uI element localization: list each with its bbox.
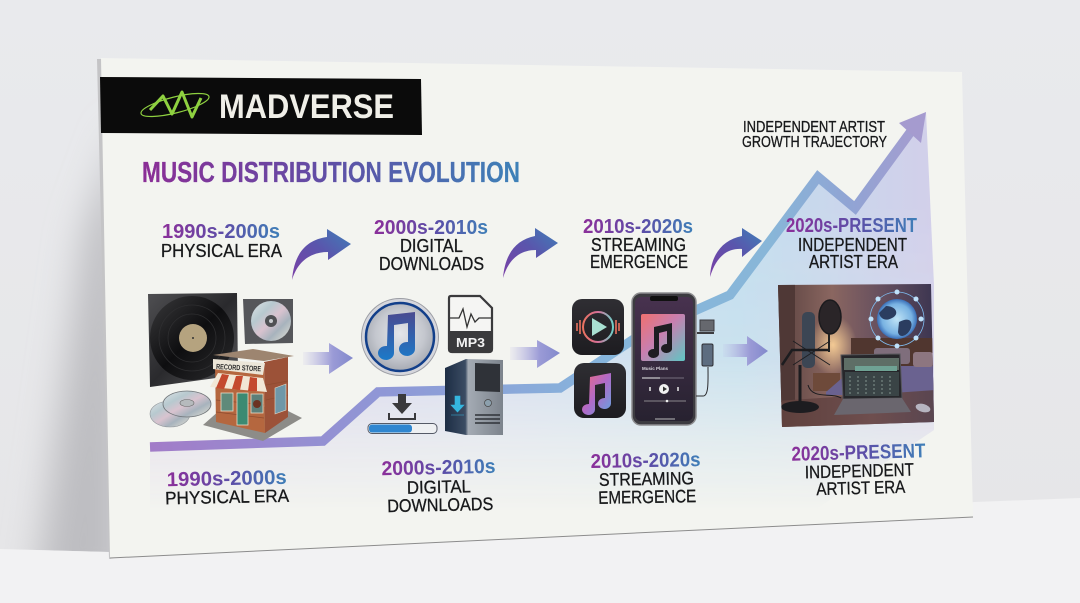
top label: digital downloads: 2000s-2010s <box>374 217 488 239</box>
bottom label: digital downloads: 2000s-2010s <box>381 456 496 480</box>
headboard and bed <box>851 338 934 395</box>
curtain <box>778 284 795 402</box>
desk <box>781 390 934 427</box>
top label: digital downloads: DOWNLOADS <box>379 254 484 274</box>
icon: record store: RECORD STORE <box>216 362 261 373</box>
globe <box>868 290 924 348</box>
bottom label: physical era <box>165 467 289 508</box>
bottom label: independent artist era: ARTIST ERA <box>816 477 906 499</box>
bottom label: physical era: 1990s-2000s <box>167 467 287 491</box>
progress bar <box>368 424 437 434</box>
icon: MP3 file <box>449 296 492 352</box>
bottom label: streaming emergence: EMERGENCE <box>598 486 696 508</box>
brand name: MADVERSE <box>219 88 394 126</box>
laptop <box>834 354 911 415</box>
top label: digital downloads <box>374 217 488 274</box>
straight arrow 2 <box>510 340 560 368</box>
bottom label: independent artist era <box>791 440 927 500</box>
top label: independent artist era: ARTIST ERA <box>809 252 898 272</box>
top label: independent artist era: 2020s-PRESENT <box>786 215 917 237</box>
wall shadow <box>26 158 109 552</box>
icon: stacked discs <box>150 391 211 427</box>
icon: desktop tower <box>445 359 503 435</box>
bottom label: digital downloads: DIGITAL <box>407 476 471 498</box>
straight arrow 1 <box>303 343 353 374</box>
icon: smartphone: Music Plans <box>642 366 669 371</box>
bottom label: digital downloads <box>381 456 496 516</box>
top label: digital downloads: DIGITAL <box>400 236 463 256</box>
title: MUSIC DISTRIBUTION EVOLUTION <box>142 157 520 189</box>
straight arrow 3 <box>723 336 768 366</box>
home studio scene <box>776 282 936 430</box>
brand banner <box>100 77 422 135</box>
top label: independent artist era: INDEPENDENT <box>798 235 907 255</box>
icon: music app <box>574 363 626 418</box>
top label: streaming emergence: EMERGENCE <box>590 252 688 272</box>
poster board <box>97 58 973 559</box>
top label: streaming emergence: 2010s-2020s <box>583 216 693 238</box>
icon: connected devices <box>696 320 714 396</box>
bottom label: streaming emergence: STREAMING <box>599 468 694 490</box>
floor <box>0 498 1080 603</box>
curved arrow 3 <box>710 228 762 277</box>
growth trajectory line with arrowhead <box>150 112 926 447</box>
trajectory label: GROWTH TRAJECTORY <box>742 134 887 151</box>
curved arrow 2 <box>503 228 558 278</box>
icon: streaming play app <box>572 299 624 355</box>
top label: streaming emergence <box>583 216 693 272</box>
growth trajectory area fill <box>150 112 934 476</box>
top label: independent artist era <box>786 215 917 272</box>
bottom label: streaming emergence <box>590 449 701 508</box>
bottom label: independent artist era: 2020s-PRESENT <box>791 440 926 466</box>
bottom label: streaming emergence: 2010s-2020s <box>590 449 701 473</box>
icon: music player disc <box>362 298 438 376</box>
icon: smartphone <box>632 293 696 425</box>
icon: download tray <box>389 394 415 419</box>
top label: physical era <box>161 221 282 261</box>
mouse <box>916 404 930 412</box>
icon: MP3 file: MP3 <box>456 335 485 350</box>
nightstand <box>813 373 840 391</box>
top label: physical era: PHYSICAL ERA <box>161 241 282 261</box>
physical media illustration <box>148 293 302 441</box>
curved arrow 1 <box>292 229 351 280</box>
icon: record store <box>203 349 302 441</box>
icon: CD in jewel case <box>243 299 293 344</box>
bottom label: physical era: PHYSICAL ERA <box>165 486 289 508</box>
microphone <box>781 300 841 413</box>
bottom label: independent artist era: INDEPENDENT <box>805 460 914 482</box>
icon: madverse logo <box>139 89 211 121</box>
digital downloads illustration <box>362 296 503 435</box>
bottom label: digital downloads: DOWNLOADS <box>387 494 493 516</box>
top label: physical era: 1990s-2000s <box>162 221 280 243</box>
trajectory label: INDEPENDENT ARTIST <box>743 119 885 136</box>
trajectory label <box>742 119 887 151</box>
icon: vinyl record in sleeve <box>148 293 238 387</box>
streaming illustration <box>572 293 714 425</box>
top label: streaming emergence: STREAMING <box>591 235 686 255</box>
